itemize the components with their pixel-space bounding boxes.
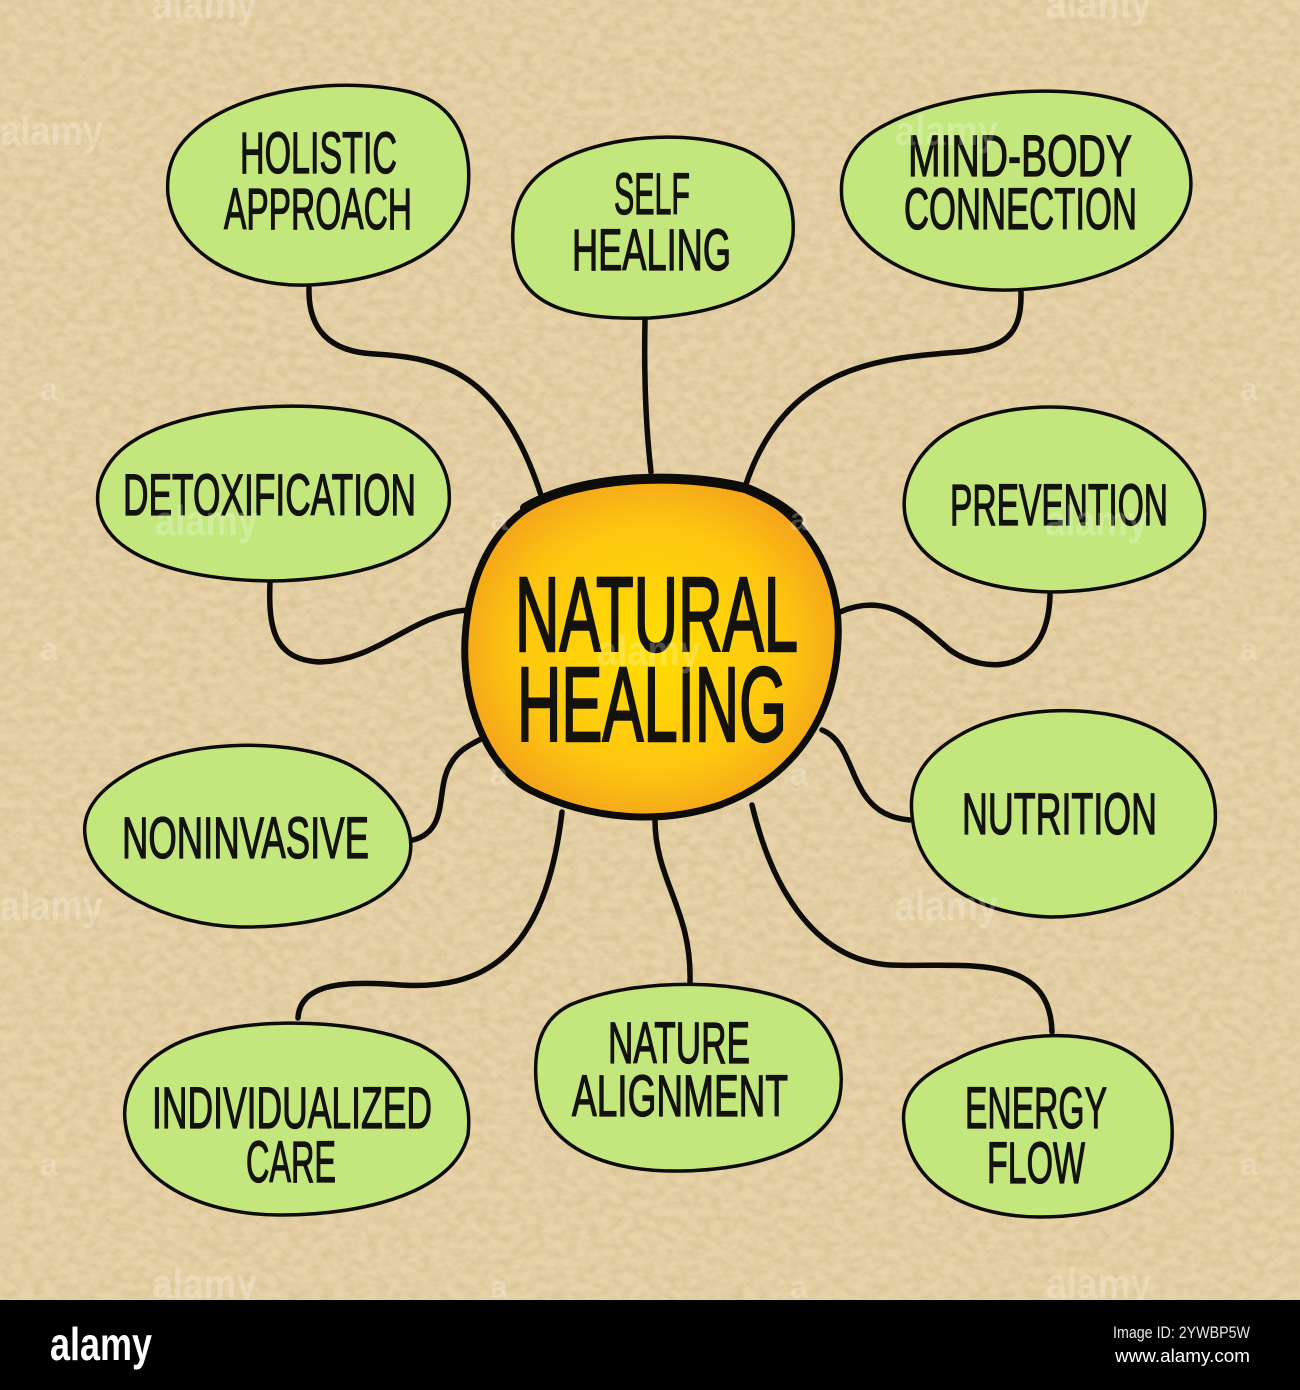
stock watermarks: a xyxy=(40,1146,58,1182)
stock watermarks: alamy xyxy=(0,882,104,929)
node: mind-body connection: MIND-BODY xyxy=(908,124,1132,189)
node: nature alignment: NATURE xyxy=(608,1011,750,1076)
node: individualized care: CARE xyxy=(246,1130,336,1195)
node: energy flow: ENERGY xyxy=(965,1076,1107,1141)
node: energy flow: FLOW xyxy=(987,1131,1085,1196)
stock watermarks: a xyxy=(790,756,808,792)
node: noninvasive xyxy=(85,745,411,927)
node: mind-body connection xyxy=(841,91,1191,290)
stock watermarks: a xyxy=(790,1269,808,1305)
stock watermarks: a xyxy=(490,1269,508,1305)
node: holistic approach: HOLISTIC xyxy=(240,121,397,186)
stock watermarks: a xyxy=(40,371,58,407)
stock watermarks: alamy xyxy=(895,107,999,154)
node: self healing xyxy=(513,137,793,318)
stock watermarks: alamy xyxy=(895,882,999,929)
node: prevention xyxy=(904,407,1205,592)
stock watermarks: alamy xyxy=(597,627,701,674)
stock watermarks: alamy xyxy=(0,107,104,154)
stock watermarks: alamy xyxy=(1046,1260,1152,1307)
node: nutrition xyxy=(911,711,1215,917)
footer band: Image ID: 2YWBP5W xyxy=(1113,1323,1250,1342)
stock watermarks: a xyxy=(40,631,58,667)
stock watermarks: a xyxy=(1240,631,1258,667)
node: holistic approach xyxy=(168,85,469,285)
stock watermarks: alamy xyxy=(1045,497,1149,544)
stock watermarks: a xyxy=(790,501,808,537)
node: energy flow xyxy=(903,1036,1172,1217)
stock watermarks: a xyxy=(1240,1146,1258,1182)
stock watermarks: alamy xyxy=(155,497,259,544)
node: nature alignment: ALIGNMENT xyxy=(572,1064,788,1129)
stock watermarks: alamy xyxy=(152,1260,258,1307)
node: holistic approach: APPROACH xyxy=(224,177,412,242)
central node: natural healing xyxy=(465,478,838,817)
footer band: www.alamy.com xyxy=(1114,1346,1250,1366)
node: individualized care: INDIVIDUALIZED xyxy=(152,1076,432,1141)
stock watermarks: a xyxy=(490,501,508,537)
node: nutrition: NUTRITION xyxy=(962,782,1157,847)
stock watermarks: a xyxy=(490,756,508,792)
node: self healing: SELF xyxy=(614,162,690,227)
node: noninvasive: NONINVASIVE xyxy=(122,806,369,871)
node: detoxification xyxy=(98,406,449,581)
node: nature alignment xyxy=(536,984,841,1171)
footer band xyxy=(0,1300,1300,1390)
central node: natural healing: HEALING xyxy=(517,646,787,764)
footer band: alamy xyxy=(50,1318,152,1370)
node: detoxification: DETOXIFICATION xyxy=(123,463,416,528)
node: self healing: HEALING xyxy=(572,218,731,283)
node: individualized care xyxy=(125,1023,469,1215)
stock watermarks: a xyxy=(1240,371,1258,407)
central node: natural healing: NATURAL xyxy=(515,556,798,674)
connector lines xyxy=(270,288,1052,1032)
node: mind-body connection: CONNECTION xyxy=(904,177,1137,242)
